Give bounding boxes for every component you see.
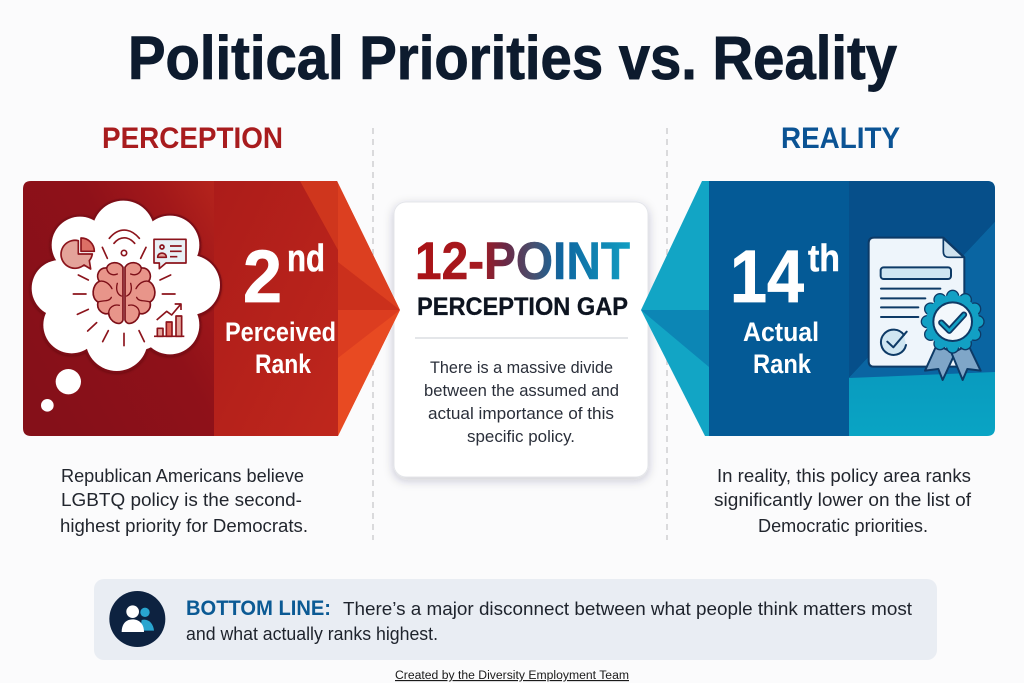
gap description: between the assumed and [424,382,619,400]
text: reality description: Democratic priorities. [758,516,928,536]
ribbons [925,345,981,380]
bottom line text: and what actually ranks highest. [186,623,438,644]
text: perception description [60,466,308,536]
text: perception description: LGBTQ policy is the second- [61,490,302,510]
rank number [730,235,840,379]
rank number: Perceived [225,317,336,347]
icon: wifi [109,230,139,256]
footer credit: Created by the Diversity Employment Team [395,670,629,682]
panel: reality [641,181,995,436]
panel: perception [23,181,400,436]
gap description [424,359,619,446]
rank number: nd [287,238,325,280]
text: reality description [714,466,972,536]
rank number: Rank [753,349,812,379]
bottom line text: BOTTOM LINE: [186,597,331,620]
icon: profile card [154,239,186,269]
gap description: actual importance of this [428,405,614,423]
cloud shape [32,201,220,371]
text: reality description: significantly lower on the list of [714,490,972,510]
heading: reality: REALITY [781,122,900,155]
bottom line text [186,597,912,644]
icon: people [109,591,165,647]
text: reality description: In reality, this policy area ranks [717,466,971,486]
bottom line banner [94,579,937,660]
small check [881,330,907,355]
panel: perception gap card [394,202,648,477]
gap figure: 12-POINT [415,232,630,291]
document [869,238,964,367]
rank number: 2 [243,235,282,318]
title: Political Priorities vs. Reality [128,24,897,92]
thought bubbles [41,369,81,412]
text: perception description: Republican Americans believe [61,466,304,486]
badge [922,291,983,352]
rank number [225,235,336,379]
rank number: 14 [730,235,804,318]
heading: perception: PERCEPTION [102,122,283,155]
bottom line text: There’s a major disconnect between what people think matters most [343,598,912,619]
rank number: Rank [255,349,312,379]
gap description: specific policy. [467,428,575,446]
icon: bar chart [154,304,184,336]
icon: brain [93,263,155,323]
icon: pie chart [61,238,94,269]
text: perception description: highest priority for Democrats. [60,516,308,536]
rank number: Actual [743,317,819,347]
icon: rays [73,247,175,346]
gap label: PERCEPTION GAP [417,293,628,321]
icon: certificate with ribbon [869,238,983,380]
thought cloud with brain [32,201,220,412]
gap description: There is a massive divide [430,359,613,377]
rank number: th [808,238,840,280]
